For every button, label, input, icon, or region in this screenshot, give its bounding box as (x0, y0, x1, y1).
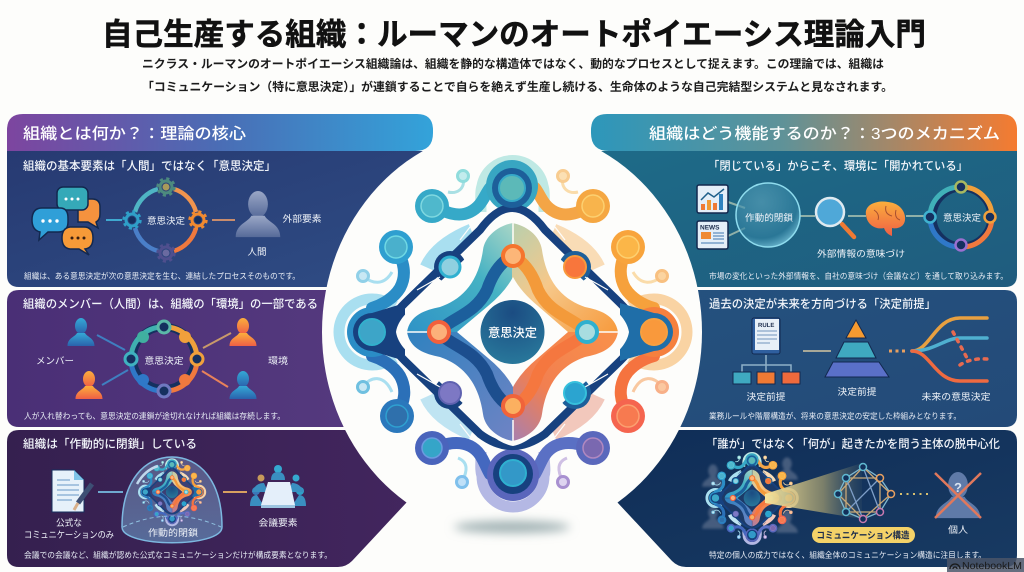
label: premise center: 決定前提 (838, 386, 877, 398)
icon: magnifier (816, 198, 854, 237)
label: operational closure: 作動的閉鎖 (745, 212, 793, 224)
label pill: communication structure (812, 527, 915, 543)
label pill: communication structure: コミュニケーション構造 (816, 530, 910, 542)
network artwork (339, 160, 687, 507)
icon: dome with network (122, 457, 222, 543)
dots (900, 493, 931, 495)
panel heading: 組織は「作動的に閉鎖」している (23, 437, 197, 451)
subtitle text block: ニクラス・ルーマンのオートポイエーシス組織論は、組織を静的な構造体ではなく、動的なプロセスとして捉えます。この理論では、組織は (142, 57, 884, 71)
panel: decision is the basic element (23, 159, 322, 281)
separator ticks (407, 223, 618, 441)
reopen gap inside ring (396, 216, 629, 446)
dots (889, 350, 907, 352)
inner swirl ribbons (439, 256, 586, 408)
spotlight beam (765, 463, 862, 519)
icons: four people (68, 318, 256, 399)
left column panels (7, 151, 440, 567)
icon: speech bubbles (32, 187, 100, 255)
panel heading: 組織の基本要素は「人間」ではなく「意思決定」 (23, 159, 276, 173)
icon: rule book: RULE (758, 322, 774, 329)
label: formal communication only: 公式な (56, 518, 82, 529)
label: individual: 個人 (948, 525, 969, 536)
right header band: 組織はどう機能するのか？：3つのメカニズム (649, 125, 1000, 143)
label: decision: 意思決定 (147, 216, 185, 227)
decision ring (924, 182, 996, 250)
label: meeting element: 会議要素 (258, 518, 298, 529)
label: environment: 環境 (268, 356, 289, 367)
label: external element: 外部要素 (282, 214, 322, 225)
icon: crossed-out individual (935, 472, 981, 518)
subtitle text block (142, 57, 893, 94)
right column panels (585, 151, 1017, 567)
panel heading: 「誰が」ではなく「何が」起きたかを問う主体の脱中心化 (706, 437, 1000, 451)
caption: 特定の個人の成力ではなく、組織全体のコミュニケーション構造に注目します。 (709, 550, 986, 560)
colored node collars (347, 160, 679, 501)
white center backdrop (0, 127, 1024, 572)
center label: 意思決定 (488, 326, 537, 340)
caption: 人が入れ替わっても、意思決定の連鎖が途切れなければ組織は存続します。 (24, 411, 285, 421)
white gap diamond (392, 212, 633, 449)
main nodes (359, 175, 667, 486)
title: 自己生産する組織：ルーマンのオートポイエーシス理論入門 (102, 17, 926, 52)
left header band (7, 114, 433, 151)
label: decision: 意思決定 (943, 213, 981, 224)
curls with small knobs (358, 170, 668, 488)
subtitle text block: 「コミュニケーション（特に意思決定）」が連鎖することで自らを絶えず生産し続ける、生命体のような自己完結型システムと見なされます。 (142, 80, 893, 94)
network of nodes (834, 464, 894, 522)
watermark badge: NotebookLM (962, 561, 1022, 572)
connector left (98, 491, 123, 493)
icon: document and pen (52, 470, 92, 512)
decision cycle with gears (124, 179, 206, 261)
caption: 会議での会議など、組織が認めた公式なコミュニケーションだけが構成要素となります。 (24, 550, 332, 560)
org chart (733, 355, 800, 384)
icon: chart card (697, 185, 728, 213)
panel background: members (7, 290, 440, 427)
icon: newspaper (697, 221, 728, 249)
connector right (223, 491, 247, 493)
connector (803, 350, 831, 352)
ground shadow (454, 521, 570, 533)
outer halos (339, 161, 687, 507)
branching paths (912, 318, 987, 381)
icon: rule book (752, 318, 780, 354)
inner white diamond (457, 277, 568, 387)
panel background: decentering (585, 430, 1017, 567)
icon: network motif (707, 453, 797, 543)
label: decision: 意思決定 (144, 356, 184, 367)
icon: crossed-out individual: ? (954, 480, 962, 495)
connector left (106, 219, 122, 221)
label: formal communication only (24, 518, 114, 541)
panel: decentering the subject (702, 437, 1000, 560)
panel background: closure (7, 430, 440, 567)
panel background: decision basics (7, 151, 440, 287)
panel: members are environment (23, 297, 318, 421)
white spike accents (417, 227, 608, 437)
ring two colored band (407, 223, 618, 441)
label: human: 人間 (248, 247, 266, 258)
icon: person silhouette (236, 191, 280, 237)
label: premise left: 決定前提 (746, 391, 786, 403)
caption: 組織は、ある意思決定が次の意思決定を生む、連結したプロセスそのものです。 (24, 271, 300, 281)
panel background: decision premises (585, 290, 1017, 427)
watermark badge (947, 558, 1024, 572)
icons: faded people (702, 457, 798, 533)
connector right (212, 219, 235, 221)
caption: 業務ルールや階層構造が、将来の意思決定の安定した枠組みとなります。 (709, 411, 961, 421)
left header band: 組織とは何か？：理論の核心 (23, 125, 246, 143)
right header band (591, 114, 1017, 151)
panel: operational closure (23, 437, 332, 560)
icon: brain (866, 202, 905, 236)
icon: glass sphere (736, 183, 800, 247)
center circle (480, 300, 544, 364)
icon: meeting table (250, 465, 306, 508)
label: operational closure: 作動的閉鎖 (148, 527, 199, 539)
connector lines (728, 202, 930, 236)
dark ring and node blobs (353, 168, 673, 494)
terminal bulbs (379, 189, 645, 465)
panel heading: 過去の決定が未来を方向づける「決定前提」 (709, 297, 936, 311)
terminal arms (372, 188, 654, 474)
label: formal communication only: コミュニケーションのみ (24, 530, 114, 541)
central decision-network diagram (339, 160, 687, 533)
label: future decisions: 未来の意思決定 (922, 392, 991, 403)
decision ring (125, 321, 203, 397)
panel background: closed and open (585, 151, 1017, 287)
panel: closed therefore open (697, 159, 1008, 281)
panel heading: 「閉じている」からこそ、環境に「開かれている」 (708, 159, 968, 173)
connector lines (97, 333, 231, 387)
icon: newspaper: NEWS (700, 224, 720, 232)
panel: decision premises (709, 297, 991, 421)
label: members: メンバー (36, 356, 74, 367)
icon: pyramid (825, 320, 889, 377)
panel heading: 組織のメンバー（人間）は、組織の「環境」の一部である (23, 297, 318, 311)
label: sensemaking of external info: 外部情報の意味づけ (817, 249, 905, 260)
